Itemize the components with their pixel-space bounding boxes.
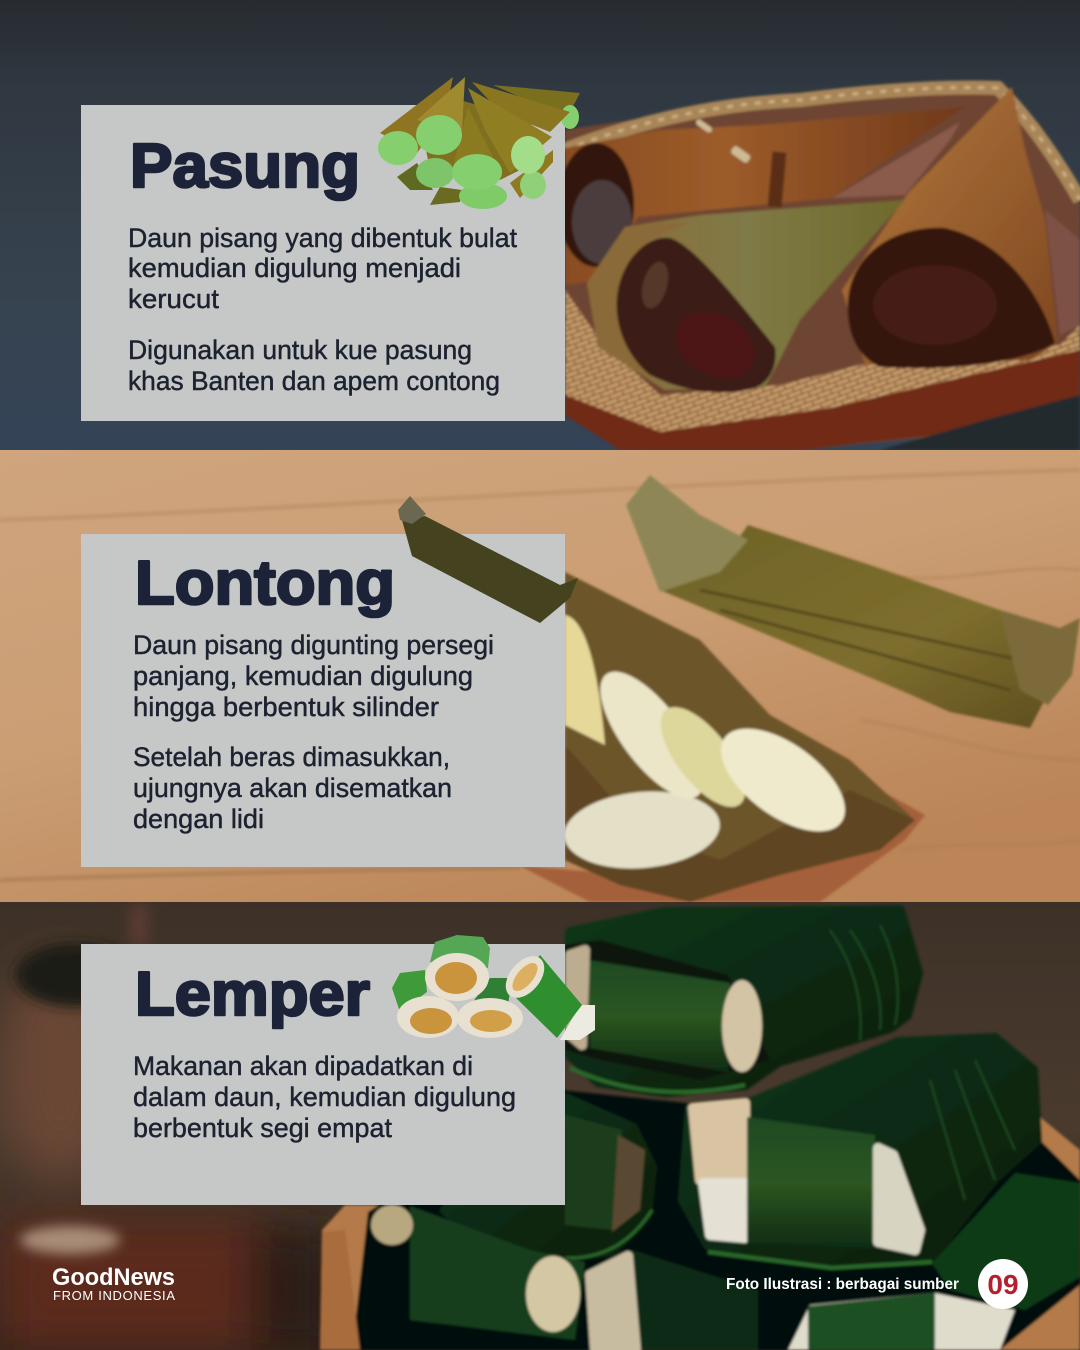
text block: Lemper description: berbentuk segi empat bbox=[133, 1113, 392, 1143]
text block: Lontong description bbox=[133, 630, 494, 834]
text block: Lontong description: Setelah beras dimasukkan, bbox=[133, 742, 450, 772]
text block: Lontong description: hingga berbentuk silinder bbox=[133, 692, 439, 722]
photo: lemper stacked in a bamboo basket bbox=[0, 902, 1080, 1350]
text block: Lontong description: panjang, kemudian digulung bbox=[133, 661, 473, 691]
text block: Pasung description: Daun pisang yang dibentuk bulat bbox=[128, 223, 517, 253]
icon: sliced lemper rolls bbox=[392, 935, 595, 1040]
text block: Lontong description: ujungnya akan disematkan bbox=[133, 773, 452, 803]
icon: wrapped lontong roll bbox=[398, 496, 578, 623]
text block: Pasung description: Digunakan untuk kue pasung bbox=[128, 335, 472, 365]
heading: Lontong: Lontong bbox=[135, 549, 395, 618]
text block: Lontong description: Daun pisang digunting persegi bbox=[133, 630, 494, 660]
logo: GoodNews from Indonesia bbox=[52, 1264, 175, 1303]
photo: pasung cones in a basket bbox=[0, 0, 1080, 450]
page number badge: 09 bbox=[987, 1269, 1019, 1300]
text block: Pasung description: khas Banten dan apem contong bbox=[128, 366, 500, 396]
text block: Lontong description: dengan lidi bbox=[133, 804, 264, 834]
photo credit: Foto Ilustrasi : berbagai sumber bbox=[726, 1276, 959, 1293]
logo: GoodNews from Indonesia: FROM INDONESIA bbox=[53, 1288, 175, 1303]
text block: Pasung description: kerucut bbox=[128, 284, 220, 314]
heading: Pasung: Pasung bbox=[130, 132, 360, 201]
text block: Lemper description bbox=[133, 1051, 516, 1143]
text block: Pasung description: kemudian digulung menjadi bbox=[128, 253, 461, 283]
text block: Pasung description bbox=[128, 223, 517, 396]
text block: Lemper description: dalam daun, kemudian digulung bbox=[133, 1082, 516, 1112]
photo: lontong on banana leaf bbox=[0, 450, 1080, 902]
page number badge bbox=[978, 1259, 1028, 1309]
panel: Pasung bbox=[81, 105, 565, 421]
logo: GoodNews from Indonesia: GoodNews bbox=[52, 1264, 175, 1291]
heading: Lemper: Lemper bbox=[135, 960, 370, 1029]
panel: Lemper bbox=[81, 944, 565, 1205]
icon: green pasung cakes bbox=[378, 77, 580, 209]
panel: Lontong bbox=[81, 534, 565, 867]
text block: Lemper description: Makanan akan dipadatkan di bbox=[133, 1051, 473, 1081]
